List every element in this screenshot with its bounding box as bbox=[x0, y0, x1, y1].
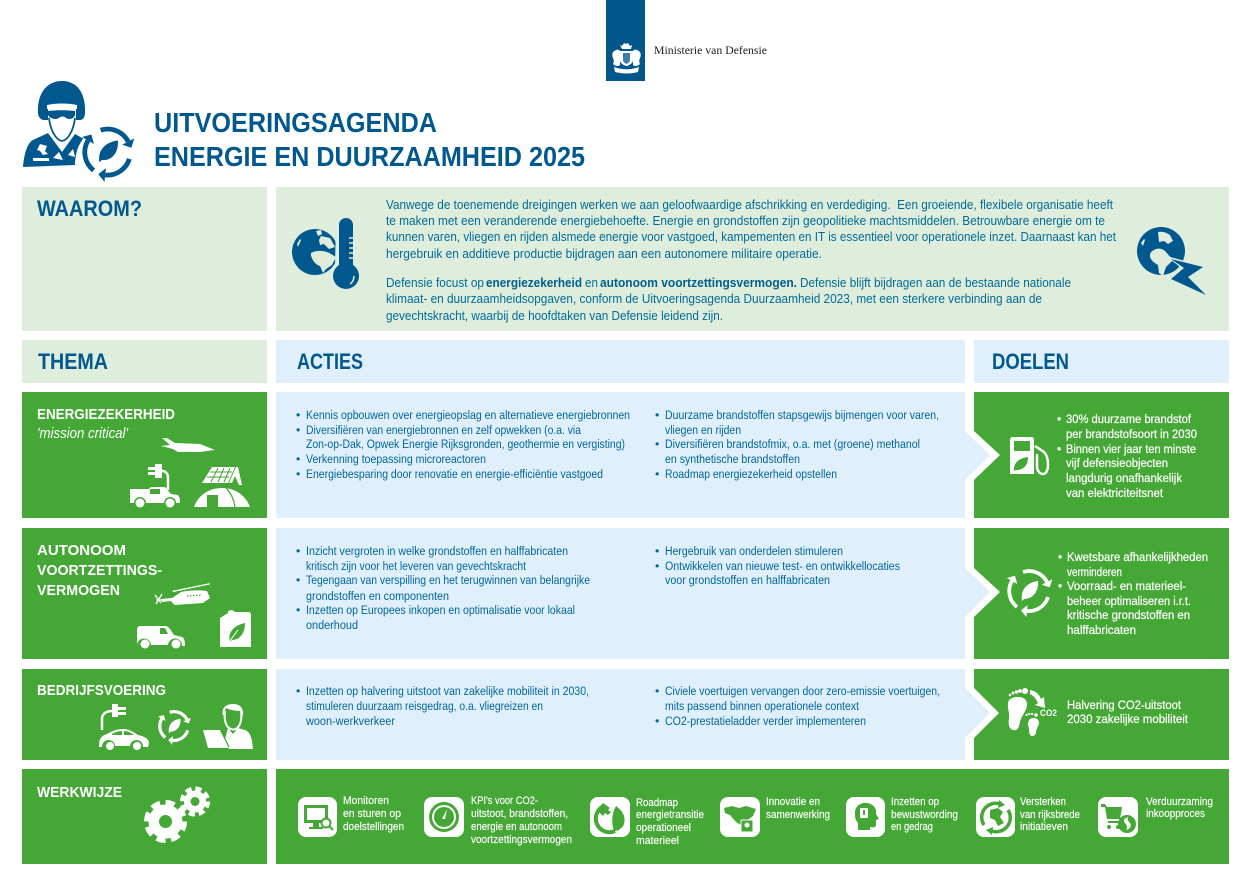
icon: plug and pick-up truck bbox=[130, 464, 180, 508]
panel: energiezekerheid goals: per brandstofsoort in 2030 bbox=[1066, 427, 1197, 441]
item: bewustwording: en gedrag bbox=[891, 821, 933, 833]
icon: recycling arrows bbox=[158, 712, 191, 745]
item: rijksbrede initiatieven: Versterken bbox=[1020, 796, 1066, 808]
title bbox=[154, 107, 585, 172]
panel: energiezekerheid actions: • bbox=[296, 423, 300, 437]
panel: energiezekerheid actions: en synthetische brandstoffen bbox=[665, 452, 800, 466]
text: why paragraph 1 bbox=[386, 198, 1116, 261]
panel: autonoom voortzettingsvermogen theme: VERMOGEN bbox=[37, 582, 120, 599]
panel: autonoom voortzettingsvermogen theme bbox=[22, 528, 267, 659]
panel: bedrijfsvoering theme bbox=[22, 669, 267, 760]
panel: energiezekerheid goals: 30% duurzame brandstof bbox=[1066, 412, 1192, 426]
panel: energiezekerheid actions: Energiebesparing door renovatie en energie-efficiëntie vastgoed bbox=[306, 467, 603, 481]
panel: energiezekerheid actions: • bbox=[655, 467, 659, 481]
item: innovatie: Innovatie en bbox=[766, 796, 820, 808]
text: why paragraph 2: Defensie blijft bijdragen aan de bestaande nationale bbox=[800, 276, 1071, 290]
item: KPI's bbox=[424, 795, 572, 846]
panel: energiezekerheid theme: 'mission critical' bbox=[37, 425, 129, 442]
item: KPI's: energie en autonoom bbox=[471, 821, 562, 833]
panel: bedrijfsvoering actions: • bbox=[655, 684, 659, 698]
item: inkoopproces: Verduurzaming bbox=[1146, 796, 1213, 808]
panel: energiezekerheid actions: Verkenning toepassing microreactoren bbox=[306, 452, 486, 466]
heading: doelen: DOELEN bbox=[992, 349, 1069, 374]
logo: Rijksoverheid coat of arms bbox=[606, 0, 645, 81]
item: innovatie bbox=[720, 796, 830, 837]
item: rijksbrede initiatieven bbox=[976, 796, 1080, 837]
icon: fighter jet bbox=[161, 438, 215, 452]
panel: autonoom voortzettingsvermogen goals bbox=[974, 528, 1229, 659]
text: why paragraph 1: hergebruik en additieve productie bijdragen aan een autonomere militaire operatie. bbox=[386, 247, 822, 261]
panel: waarom label: WAAROM? bbox=[37, 196, 142, 221]
text: why paragraph 1: kunnen varen, vliegen en rijden alsmede energie voor vastgoed, kampementen en IT is essentieel voor operationele inzet. Daarnaast kan het bbox=[386, 230, 1116, 244]
text: why paragraph 2 bbox=[386, 276, 1071, 323]
panel: bedrijfsvoering actions: stimuleren duurzaam reisgedrag, o.a. vliegreizen en bbox=[306, 699, 543, 713]
panel: energiezekerheid actions: • bbox=[296, 452, 300, 466]
panel: bedrijfsvoering goals: Halvering CO2-uitstoot bbox=[1067, 698, 1182, 712]
panel: energiezekerheid actions: • bbox=[655, 437, 659, 451]
item: monitoren: doelstellingen bbox=[343, 821, 404, 833]
panel: autonoom voortzettingsvermogen goals: verminderen bbox=[1067, 565, 1122, 579]
panel: autonoom voortzettingsvermogen goals: halffabricaten bbox=[1067, 623, 1136, 637]
icon: fuel can with leaf bbox=[220, 610, 251, 647]
heading: thema: THEMA bbox=[38, 349, 108, 374]
heading: acties: ACTIES bbox=[297, 349, 363, 374]
panel: autonoom voortzettingsvermogen actions: • bbox=[296, 603, 300, 617]
heading: thema bbox=[22, 340, 267, 383]
panel: energiezekerheid actions: vliegen en rijden bbox=[665, 423, 741, 437]
panel: energiezekerheid goals: van elektriciteitsnet bbox=[1066, 486, 1164, 500]
panel: autonoom voortzettingsvermogen theme: AUTONOOM bbox=[37, 542, 126, 559]
panel: energiezekerheid actions: • bbox=[296, 408, 300, 422]
title: ENERGIE EN DUURZAAMHEID 2025 bbox=[154, 141, 585, 172]
panel: waarom label bbox=[22, 187, 267, 331]
panel: autonoom voortzettingsvermogen actions: • bbox=[296, 544, 300, 558]
icon: CO2 footprints bbox=[1008, 688, 1045, 736]
panel: energiezekerheid goals: vijf defensieobjecten bbox=[1066, 456, 1168, 470]
panel: werkwijze label: WERKWIJZE bbox=[37, 784, 122, 801]
icon: gears bbox=[147, 789, 208, 840]
panel: energiezekerheid goals: • bbox=[1057, 412, 1061, 426]
heading: acties bbox=[276, 340, 965, 383]
item: bewustwording: bewustwording bbox=[891, 809, 958, 821]
panel: autonoom voortzettingsvermogen actions bbox=[276, 528, 990, 659]
item: inkoopproces: inkoopproces bbox=[1146, 808, 1206, 820]
panel: autonoom voortzettingsvermogen goals: Kwetsbare afhankelijkheden bbox=[1067, 550, 1208, 564]
text: why paragraph 2: gevechtskracht, waarbij de hoofdtaken van Defensie leidend zijn. bbox=[386, 309, 723, 323]
item: roadmap: materieel bbox=[636, 835, 679, 847]
item: KPI's: KPI's voor CO2- bbox=[471, 795, 538, 807]
panel: bedrijfsvoering actions: CO2-prestatieladder verder implementeren bbox=[665, 714, 866, 728]
panel: autonoom voortzettingsvermogen goals: Voorraad- en materieel- bbox=[1067, 579, 1186, 593]
panel: bedrijfsvoering goals bbox=[974, 669, 1229, 760]
panel: energiezekerheid theme bbox=[22, 392, 267, 518]
panel: werkwijze items bbox=[276, 769, 1229, 864]
panel: energiezekerheid goals: • bbox=[1057, 442, 1061, 456]
heading: doelen bbox=[974, 340, 1229, 383]
panel: autonoom voortzettingsvermogen goals: beheer optimaliseren i.r.t. bbox=[1067, 594, 1191, 608]
item: KPI's: uitstoot, brandstoffen, bbox=[471, 808, 568, 820]
panel: autonoom voortzettingsvermogen actions: grondstoffen en componenten bbox=[306, 589, 449, 603]
text: CO2 label: CO2 bbox=[1040, 708, 1057, 718]
panel: autonoom voortzettingsvermogen actions: Ontwikkelen van nieuwe test- en ontwikkellocaties bbox=[665, 559, 900, 573]
icon: globe with thermometer bbox=[292, 215, 362, 292]
panel: energiezekerheid actions: • bbox=[655, 408, 659, 422]
panel: autonoom voortzettingsvermogen actions: onderhoud bbox=[306, 618, 358, 632]
text: why paragraph 2: Defensie focust op bbox=[386, 276, 484, 290]
panel: autonoom voortzettingsvermogen goals: • bbox=[1058, 550, 1062, 564]
panel: energiezekerheid goals bbox=[974, 392, 1229, 518]
panel: energiezekerheid theme: ENERGIEZEKERHEID bbox=[37, 406, 175, 423]
panel: energiezekerheid actions: Roadmap energiezekerheid opstellen bbox=[665, 467, 837, 481]
panel: energiezekerheid actions: Diversifiëren brandstofmix, o.a. met (groene) methanol bbox=[665, 437, 920, 451]
item: inkoopproces bbox=[1098, 796, 1213, 837]
icon: tent with solar panel bbox=[194, 467, 250, 507]
panel: werkwijze label bbox=[22, 769, 267, 864]
panel: bedrijfsvoering goals: 2030 zakelijke mobiliteit bbox=[1067, 712, 1189, 726]
panel: energiezekerheid actions: Zon-op-Dak, Opwek Energie Rijksgronden, geothermie en vergisting) bbox=[306, 437, 625, 451]
panel: autonoom voortzettingsvermogen actions: Inzetten op Europees inkopen en optimalisatie voor lokaal bbox=[306, 603, 575, 617]
panel: waarom text bbox=[276, 187, 1229, 331]
item: monitoren: en sturen op bbox=[343, 808, 401, 820]
panel: autonoom voortzettingsvermogen goals: • bbox=[1058, 579, 1062, 593]
item: bewustwording bbox=[846, 796, 958, 837]
panel: energiezekerheid actions bbox=[276, 392, 990, 518]
item: monitoren bbox=[298, 795, 404, 837]
icon: globe with lightning bolt bbox=[1137, 227, 1206, 295]
panel: bedrijfsvoering actions: mits passend binnen operationele context bbox=[665, 699, 860, 713]
text: why paragraph 1: Vanwege de toenemende dreigingen werken we aan geloofwaardige afschrikking en verdediging. Een groeiende, flexibele organisatie heeft bbox=[386, 198, 1113, 212]
panel: autonoom voortzettingsvermogen actions: voor grondstoffen en halffabricaten bbox=[665, 573, 830, 587]
title: UITVOERINGSAGENDA bbox=[154, 107, 437, 138]
panel: autonoom voortzettingsvermogen goals: kritische grondstoffen en bbox=[1067, 608, 1190, 622]
text: why paragraph 2: energiezekerheid bbox=[486, 276, 582, 290]
panel: energiezekerheid actions: Diversifiëren van energiebronnen en zelf opwekken (o.a. via bbox=[306, 423, 581, 437]
text: why paragraph 2: autonoom voortzettingsvermogen. bbox=[600, 276, 797, 290]
item: rijksbrede initiatieven: initiatieven bbox=[1020, 821, 1068, 833]
panel: bedrijfsvoering actions: • bbox=[296, 684, 300, 698]
icon: utility van bbox=[137, 626, 185, 648]
item: roadmap: operationeel bbox=[636, 822, 691, 834]
panel: bedrijfsvoering actions: Civiele voertuigen vervangen door zero-emissie voertuigen, bbox=[665, 684, 940, 698]
icon: soldier with recycling arrows bbox=[23, 81, 136, 182]
icon: electric car with plug bbox=[99, 704, 149, 750]
panel: bedrijfsvoering actions: woon-werkverkeer bbox=[305, 714, 395, 728]
panel: autonoom voortzettingsvermogen actions: Hergebruik van onderdelen stimuleren bbox=[665, 544, 843, 558]
text: why paragraph 1: te maken met een veranderende energiebehoefte. Energie en grondstoffen zijn geopolitieke machtsmiddelen. Betrouwbare energie om te bbox=[386, 214, 1105, 228]
panel: autonoom voortzettingsvermogen actions: • bbox=[296, 573, 300, 587]
panel: bedrijfsvoering theme: BEDRIJFSVOERING bbox=[37, 682, 166, 699]
item: roadmap: Roadmap bbox=[636, 797, 678, 809]
panel: bedrijfsvoering actions: • bbox=[655, 714, 659, 728]
panel: autonoom voortzettingsvermogen actions: Inzicht vergroten in welke grondstoffen en halffabricaten bbox=[306, 544, 568, 558]
panel: autonoom voortzettingsvermogen actions: • bbox=[655, 559, 659, 573]
icon: person with laptop bbox=[203, 704, 253, 749]
text: why paragraph 2: en bbox=[585, 276, 598, 290]
panel: energiezekerheid goals: Binnen vier jaar ten minste bbox=[1066, 442, 1196, 456]
panel: bedrijfsvoering actions: Inzetten op halvering uitstoot van zakelijke mobiliteit in 2030, bbox=[306, 684, 589, 698]
item: monitoren: Monitoren bbox=[343, 795, 389, 807]
panel: energiezekerheid goals: langdurig onafhankelijk bbox=[1066, 471, 1183, 485]
item: KPI's: voortzettingsvermogen bbox=[471, 834, 572, 846]
item: roadmap: energietransitie bbox=[636, 809, 704, 821]
icon: helicopter bbox=[155, 583, 210, 605]
ministry name: Ministerie van Defensie bbox=[654, 43, 767, 57]
panel: autonoom voortzettingsvermogen actions: Tegengaan van verspilling en het terugwinnen van belangrijke bbox=[306, 573, 590, 587]
text: why paragraph 2: klimaat- en duurzaamheidsopgaven, conform de Uitvoeringsagenda Duurzaamheid 2023, met een sterkere verbinding aan de bbox=[386, 292, 1042, 306]
panel: energiezekerheid actions: Duurzame brandstoffen stapsgewijs bijmengen voor varen, bbox=[665, 408, 939, 422]
item: roadmap bbox=[590, 797, 704, 847]
icon: green fuel pump bbox=[1010, 437, 1048, 474]
panel: energiezekerheid actions: Kennis opbouwen over energieopslag en alternatieve energiebronnen bbox=[306, 408, 630, 422]
item: bewustwording: Inzetten op bbox=[891, 796, 939, 808]
panel: autonoom voortzettingsvermogen actions: kritisch zijn voor het leveren van gevechtskracht bbox=[306, 559, 527, 573]
item: innovatie: samenwerking bbox=[766, 809, 830, 821]
item: rijksbrede initiatieven: van rijksbrede bbox=[1020, 809, 1080, 821]
panel: autonoom voortzettingsvermogen theme: VOORTZETTINGS- bbox=[37, 562, 162, 579]
panel: energiezekerheid actions: • bbox=[296, 467, 300, 481]
panel: autonoom voortzettingsvermogen actions: • bbox=[655, 544, 659, 558]
icon: recycling arrows with leaf bbox=[1007, 571, 1052, 617]
panel: bedrijfsvoering actions bbox=[276, 669, 990, 760]
